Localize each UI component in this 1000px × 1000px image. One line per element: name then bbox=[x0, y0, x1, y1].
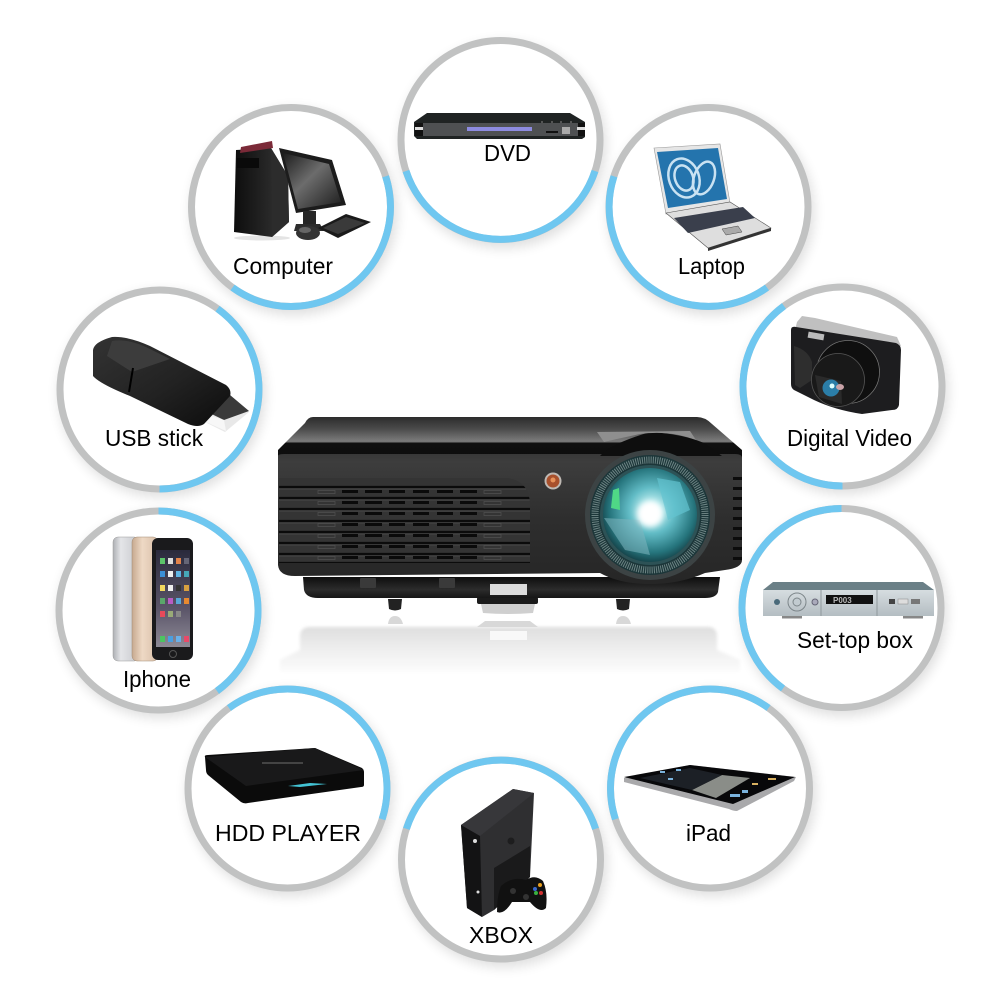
icon: Xbox console and controller bbox=[461, 789, 547, 917]
panel: iPad bbox=[610, 689, 816, 896]
label: DVD: DVD bbox=[484, 140, 531, 166]
vent grille bbox=[279, 478, 530, 563]
label: HDD PLAYER: HDD PLAYER bbox=[215, 820, 361, 846]
panel: Set-top box bbox=[741, 508, 947, 716]
panel: HDD PLAYER bbox=[187, 689, 393, 896]
icon: set-top box: P003 bbox=[833, 596, 852, 605]
lens glass bbox=[603, 468, 697, 562]
label: Iphone: Iphone bbox=[123, 666, 191, 692]
icon: desktop computer bbox=[234, 141, 371, 240]
top panel bbox=[278, 417, 742, 458]
label: XBOX: XBOX bbox=[469, 922, 533, 948]
feet and stand bbox=[388, 597, 630, 614]
icon: HDD media player bbox=[205, 748, 364, 803]
reflection bbox=[280, 616, 740, 672]
icon: digital camera bbox=[791, 316, 901, 414]
projector bbox=[278, 417, 742, 672]
panel: Iphone bbox=[58, 511, 264, 718]
panel: Digital Video bbox=[742, 287, 948, 494]
label: Laptop: Laptop bbox=[678, 253, 745, 279]
label: Digital Video: Digital Video bbox=[787, 425, 912, 451]
lower base bbox=[303, 577, 720, 598]
side fins bbox=[279, 477, 742, 560]
label: Set-top box: Set-top box bbox=[797, 627, 913, 653]
panel: USB stick bbox=[59, 290, 265, 497]
indicator bbox=[544, 472, 562, 490]
lens housing bbox=[585, 431, 722, 580]
panel: Computer bbox=[191, 108, 397, 315]
label: Computer: Computer bbox=[233, 253, 333, 279]
label: USB stick: USB stick bbox=[105, 425, 203, 451]
icon: set-top box bbox=[763, 582, 934, 618]
icon: laptop bbox=[654, 144, 771, 251]
front sliders and label bbox=[360, 578, 527, 595]
label: iPad: iPad bbox=[686, 820, 731, 846]
panel: XBOX bbox=[401, 760, 607, 967]
icon: iPad tablet bbox=[624, 765, 796, 811]
panel: DVD bbox=[400, 40, 606, 248]
icon: DVD player bbox=[414, 113, 585, 139]
icon: three iPhones bbox=[113, 537, 193, 661]
front shell bbox=[278, 454, 742, 584]
icon: USB flash drive bbox=[93, 337, 249, 432]
panel: Laptop bbox=[608, 108, 814, 315]
